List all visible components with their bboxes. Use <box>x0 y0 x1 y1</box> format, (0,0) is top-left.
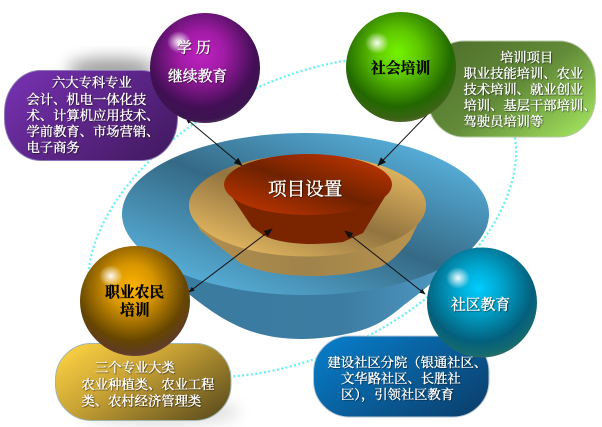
sphere: social training <box>346 12 456 122</box>
sphere: farmer training <box>80 246 190 356</box>
panel: degree education: 学前教育、市场营销、 <box>26 123 159 139</box>
central bowl diagram <box>122 133 489 339</box>
panel: training programs <box>428 41 596 137</box>
panel: majors: 农业种植类、农业工程 <box>82 376 214 392</box>
red layer <box>224 154 392 244</box>
sphere: farmer training: 职业农民 <box>105 283 164 301</box>
panel: degree education: 电子商务 <box>26 139 80 155</box>
panel: training programs: 职业技能培训、农业 <box>464 65 583 81</box>
panel: training programs: 培训项目 <box>500 50 553 65</box>
sphere: degree education: 继续教育 <box>168 67 227 85</box>
sphere: degree education: 学 <box>177 40 192 56</box>
tan layer <box>189 154 426 276</box>
panel: majors: 类、农村经济管理类 <box>82 392 201 408</box>
sphere: farmer training: 培训 <box>120 301 150 319</box>
panel: majors: 三个专业大类 <box>95 359 175 375</box>
panel: community colleges: 区），引领社区教育 <box>341 386 454 403</box>
center label: 项目设置 <box>268 180 342 200</box>
blue base <box>122 133 489 339</box>
sphere: community education: 社区教育 <box>451 296 510 314</box>
panel: degree education: 会计、机电一体化技 <box>26 91 146 107</box>
arrow: farmer training to center <box>189 229 272 292</box>
arrow: social training to center <box>378 115 427 166</box>
sphere: degree education: 历 <box>196 40 211 56</box>
panel: community colleges: 文华路社区、长胜社 <box>341 370 461 386</box>
panel: majors <box>56 344 231 420</box>
panel: training programs: 培训、基层干部培训、 <box>464 98 596 113</box>
sphere: degree education <box>150 13 260 123</box>
panel shadow <box>67 58 157 82</box>
arrow: degree to center <box>186 118 242 166</box>
panel shadow <box>80 400 240 424</box>
panel: degree education: 六大专科专业 <box>52 74 132 90</box>
sphere: social training: 社会培训 <box>371 59 430 77</box>
panel: degree education <box>4 70 178 160</box>
arrow: community to center <box>345 231 425 294</box>
panel: degree education: 术、计算机应用技术、 <box>26 107 159 123</box>
panel: training programs: 驾驶员培训等 <box>464 113 543 129</box>
panel: training programs: 技术培训、就业创业 <box>464 81 583 97</box>
panel: community colleges <box>314 336 489 417</box>
sphere: community education <box>427 248 537 358</box>
panel: community colleges: 建设社区分院（银通社区、 <box>328 354 487 370</box>
